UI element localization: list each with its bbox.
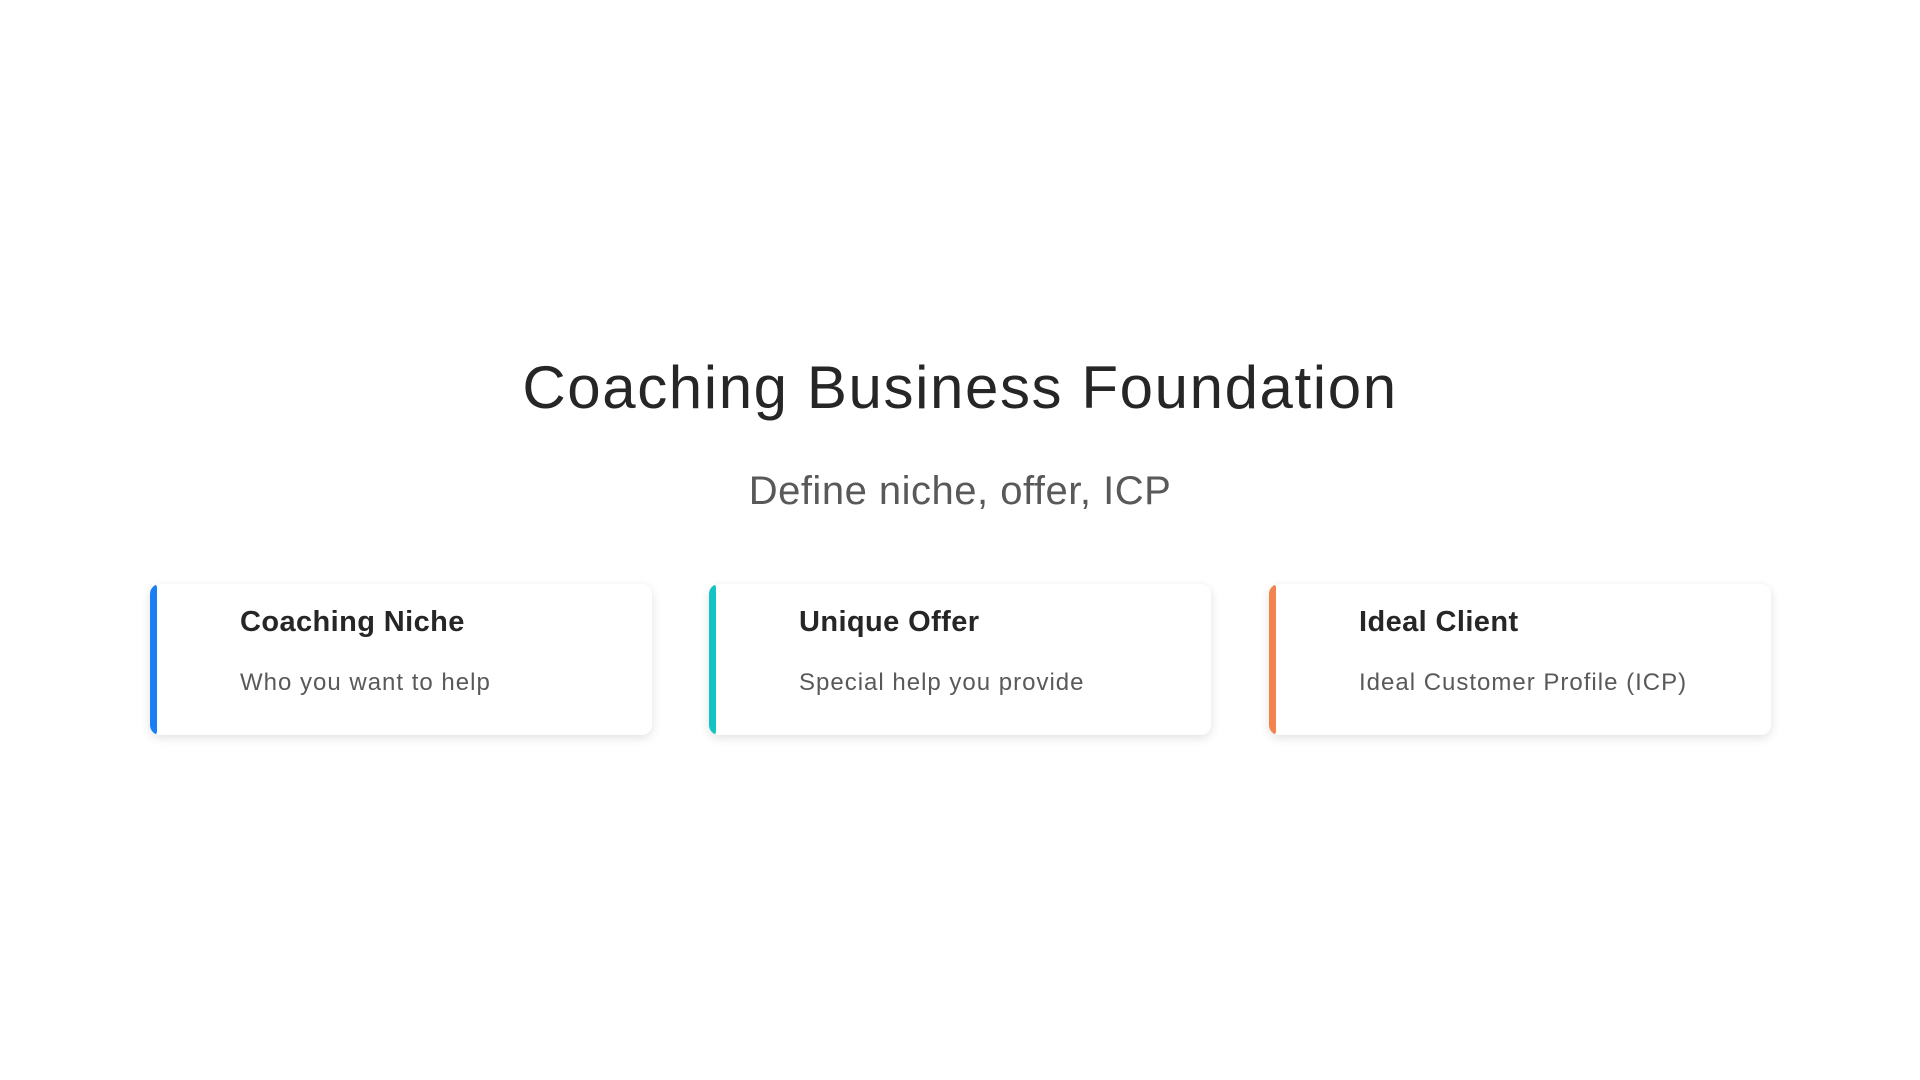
card description: Special help you provide xyxy=(799,669,1085,696)
card description: Who you want to help xyxy=(240,669,491,696)
panel: ideal client xyxy=(1269,584,1771,735)
panel: coaching niche xyxy=(150,584,652,735)
card title: Unique Offer xyxy=(799,606,979,638)
card title: Coaching Niche xyxy=(240,606,465,638)
title: Coaching Business Foundation xyxy=(522,354,1398,421)
card description: Ideal Customer Profile (ICP) xyxy=(1359,669,1687,696)
accent bar orange xyxy=(1269,584,1276,735)
subtitle: Define niche, offer, ICP xyxy=(749,469,1171,513)
accent bar blue xyxy=(150,584,157,735)
panel: unique offer xyxy=(709,584,1211,735)
accent bar teal xyxy=(709,584,716,735)
card title: Ideal Client xyxy=(1359,606,1518,638)
